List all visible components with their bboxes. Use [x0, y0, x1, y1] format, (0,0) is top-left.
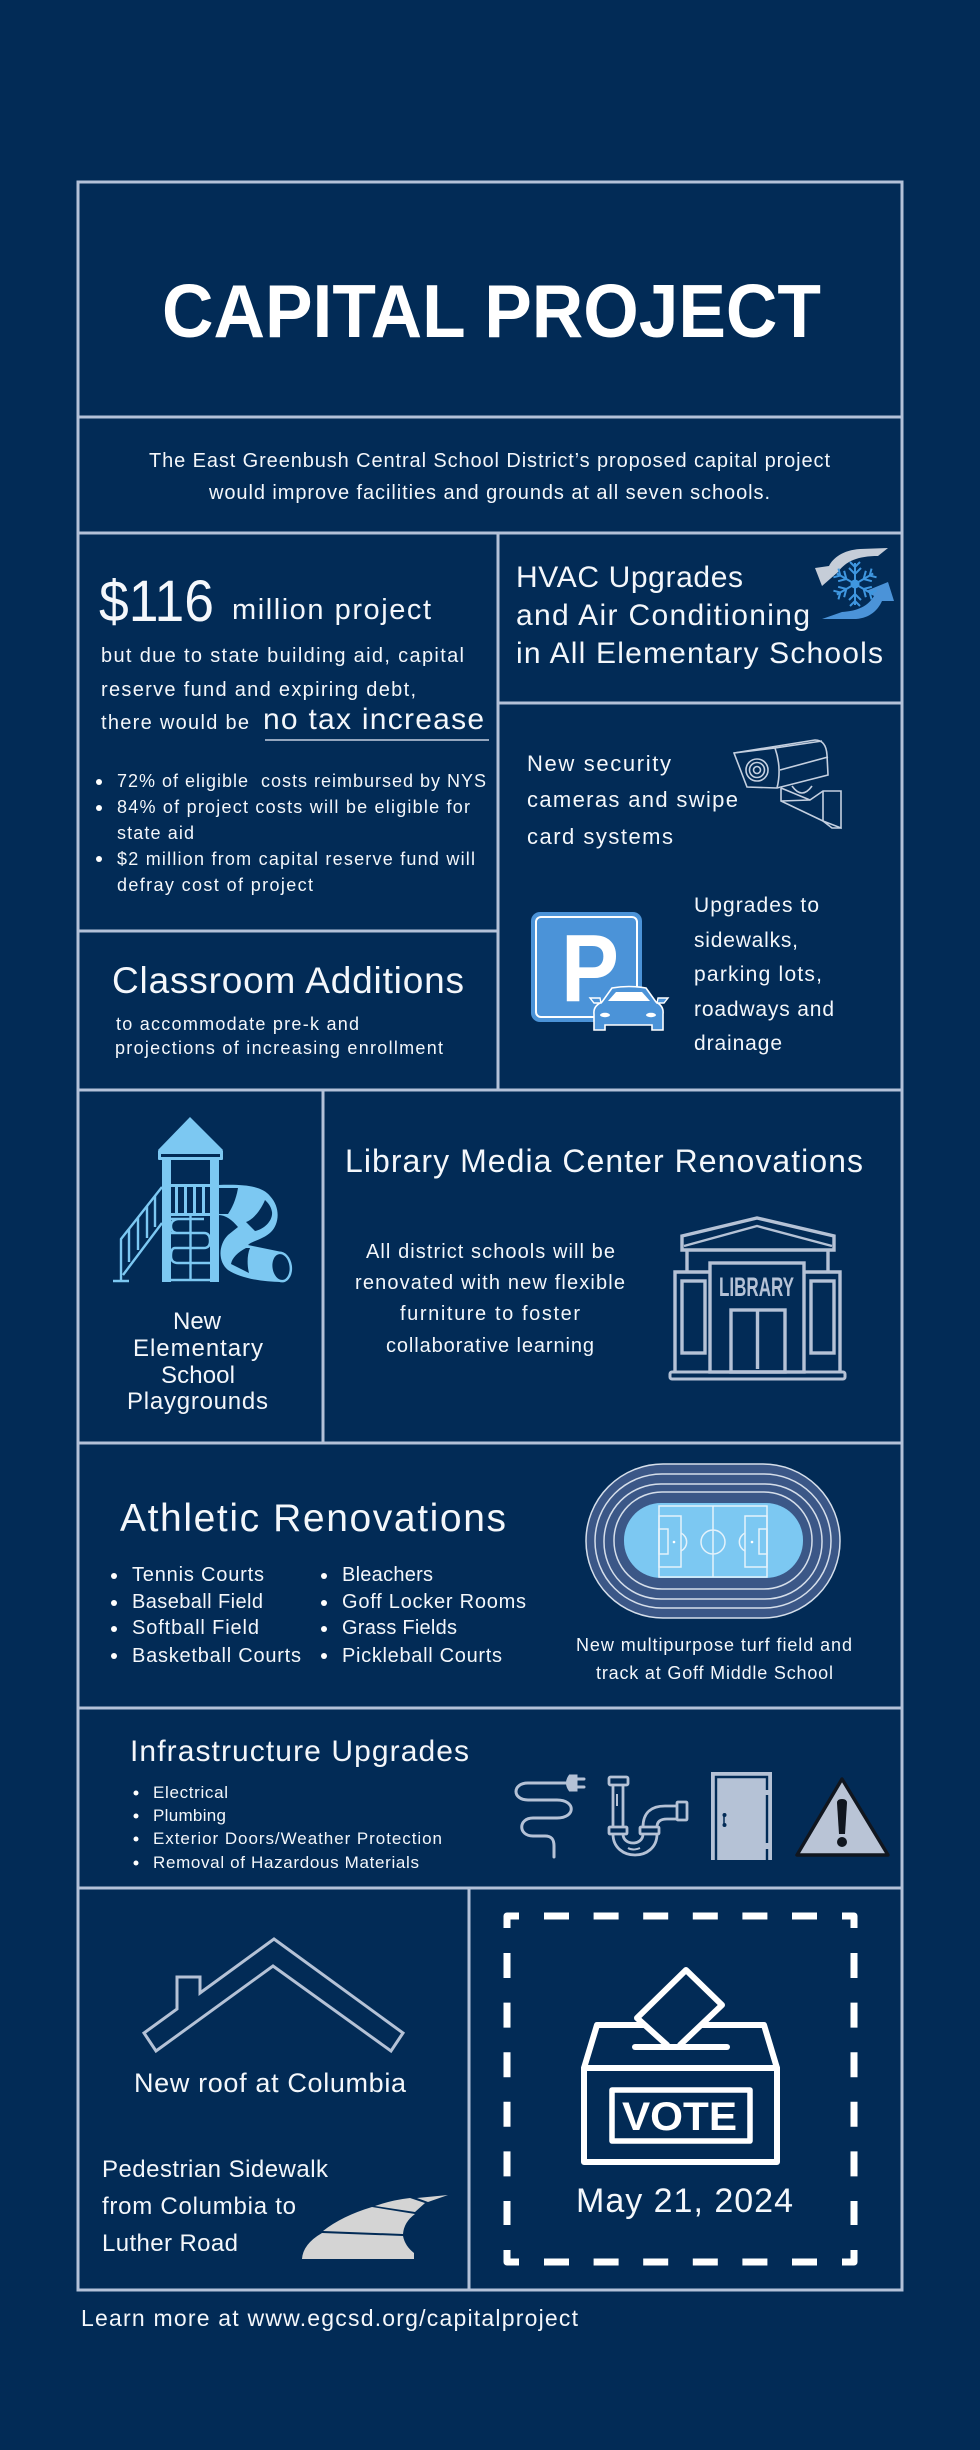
- footer link: Learn more at www.egcsd.org/capitalproject: [81, 2305, 579, 2331]
- infrastructure list: [134, 1783, 442, 1872]
- icon: library building: LIBRARY: [719, 1272, 794, 1302]
- playground label: Elementary: [133, 1335, 263, 1362]
- cost label: million project: [232, 594, 431, 626]
- intro text: would improve facilities and grounds at all seven schools.: [208, 482, 770, 504]
- panel: classroom additions: [78, 931, 498, 1090]
- library text: renovated with new flexible: [355, 1272, 625, 1294]
- panel: infrastructure upgrades: [78, 1708, 902, 1888]
- athletic list column 1: [111, 1564, 301, 1667]
- cost explanation: but due to state building aid, capital: [101, 645, 464, 667]
- HVAC heading: [516, 561, 883, 670]
- classroom text: projections of increasing enrollment: [115, 1038, 443, 1058]
- cost bullet list: $2 million from capital reserve fund will: [117, 849, 475, 869]
- security text: card systems: [527, 824, 673, 849]
- athletic list column 1: Softball Field: [132, 1617, 259, 1639]
- upgrades text: drainage: [694, 1032, 782, 1055]
- upgrades text: sidewalks,: [694, 929, 798, 952]
- cost figure: $116: [99, 569, 214, 634]
- cost bullet list: defray cost of project: [117, 875, 313, 895]
- icon: ballot box: [584, 1970, 777, 2162]
- playground label: New: [173, 1308, 222, 1335]
- cost bullet list: 84% of project costs will be eligible for: [117, 797, 470, 817]
- infrastructure list: Electrical: [153, 1783, 228, 1802]
- athletic list column 2: Grass Fields: [342, 1617, 457, 1639]
- panel: introduction: [78, 417, 902, 533]
- cost bullet list: 72% of eligible costs reimbursed by NYS: [117, 771, 486, 791]
- icon: parking sign with car: [531, 912, 668, 1030]
- icon: door: [711, 1772, 772, 1860]
- track caption: track at Goff Middle School: [596, 1663, 833, 1683]
- track caption: New multipurpose turf field and: [576, 1635, 852, 1655]
- panel: roof and sidewalk: [78, 1888, 469, 2290]
- icon: roof: [144, 1939, 403, 2051]
- icon: library building: [670, 1218, 845, 1379]
- icon: sidewalk path: [302, 2195, 448, 2259]
- athletic list column 1: Tennis Courts: [132, 1564, 264, 1586]
- vote date: May 21, 2024: [576, 2182, 793, 2220]
- panel: playgrounds: [78, 1090, 323, 1443]
- cost bullet list: [96, 771, 486, 895]
- sidewalk text: [102, 2156, 329, 2257]
- icon: ballot box: VOTE: [622, 2095, 737, 2139]
- cost explanation: there would be: [101, 712, 249, 734]
- upgrades text: Upgrades to: [694, 894, 819, 917]
- upgrades text: [694, 894, 834, 1055]
- sidewalk text: Luther Road: [102, 2230, 238, 2257]
- icon: track and turf field: [586, 1464, 840, 1618]
- icon: HVAC snowflake with arrows: [815, 548, 894, 619]
- athletic heading: Athletic Renovations: [120, 1497, 506, 1540]
- athletic list column 2: [321, 1564, 526, 1667]
- infrastructure list: Removal of Hazardous Materials: [153, 1853, 419, 1872]
- library text: All district schools will be: [366, 1241, 615, 1263]
- icon: parking sign with car: P: [561, 915, 619, 1022]
- upgrades text: parking lots,: [694, 963, 822, 986]
- classroom heading: Classroom Additions: [112, 960, 464, 1001]
- athletic list column 2: Bleachers: [342, 1564, 433, 1586]
- playground label: Playgrounds: [127, 1388, 268, 1415]
- icon: hazard warning: [797, 1779, 888, 1855]
- playground label: [127, 1308, 268, 1415]
- security text: cameras and swipe: [527, 787, 738, 812]
- track caption: [576, 1635, 852, 1683]
- infrastructure list: Exterior Doors/Weather Protection: [153, 1829, 442, 1848]
- cost explanation: reserve fund and expiring debt,: [101, 679, 416, 701]
- HVAC heading: in All Elementary Schools: [516, 637, 883, 670]
- playground label: School: [161, 1362, 235, 1389]
- HVAC heading: HVAC Upgrades: [516, 561, 743, 594]
- upgrades text: roadways and: [694, 998, 834, 1021]
- classroom text: to accommodate pre-k and: [116, 1014, 359, 1034]
- panel: security and parking: [498, 703, 902, 1090]
- panel: HVAC: [498, 533, 902, 703]
- athletic list column 1: Baseball Field: [132, 1591, 263, 1613]
- panel: vote date: [469, 1888, 902, 2290]
- library heading: Library Media Center Renovations: [345, 1143, 863, 1179]
- title: CAPITAL PROJECT: [162, 269, 821, 353]
- icon: playground: [113, 1117, 294, 1284]
- panel: project cost: [78, 533, 498, 931]
- icon: electrical cable: [516, 1776, 584, 1857]
- cost bullet list: state aid: [117, 823, 194, 843]
- no tax increase emphasis: no tax increase: [263, 703, 484, 736]
- library text: collaborative learning: [386, 1335, 594, 1357]
- icon: plumbing pipe: [609, 1777, 687, 1855]
- sidewalk text: from Columbia to: [102, 2193, 296, 2220]
- panel: athletic renovations: [78, 1443, 902, 1708]
- infrastructure heading: Infrastructure Upgrades: [130, 1735, 469, 1768]
- athletic list column 1: Basketball Courts: [132, 1645, 301, 1667]
- library text: [355, 1241, 625, 1357]
- infrastructure list: Plumbing: [153, 1806, 226, 1825]
- icon: security camera: [734, 740, 841, 828]
- intro text: The East Greenbush Central School District’s proposed capital project: [149, 450, 830, 472]
- sidewalk text: Pedestrian Sidewalk: [102, 2156, 329, 2183]
- dashed vote frame: [507, 1916, 854, 2262]
- panel: title: [78, 182, 902, 417]
- HVAC heading: and Air Conditioning: [516, 599, 810, 632]
- roof label: New roof at Columbia: [134, 2068, 407, 2098]
- library text: furniture to foster: [400, 1303, 580, 1325]
- intro text: [149, 450, 830, 504]
- cost explanation: [101, 645, 464, 734]
- panel: library: [323, 1090, 902, 1443]
- security text: New security: [527, 751, 671, 776]
- classroom text: [115, 1014, 443, 1058]
- security text: [527, 751, 738, 849]
- athletic list column 2: Pickleball Courts: [342, 1645, 502, 1667]
- athletic list column 2: Goff Locker Rooms: [342, 1591, 526, 1613]
